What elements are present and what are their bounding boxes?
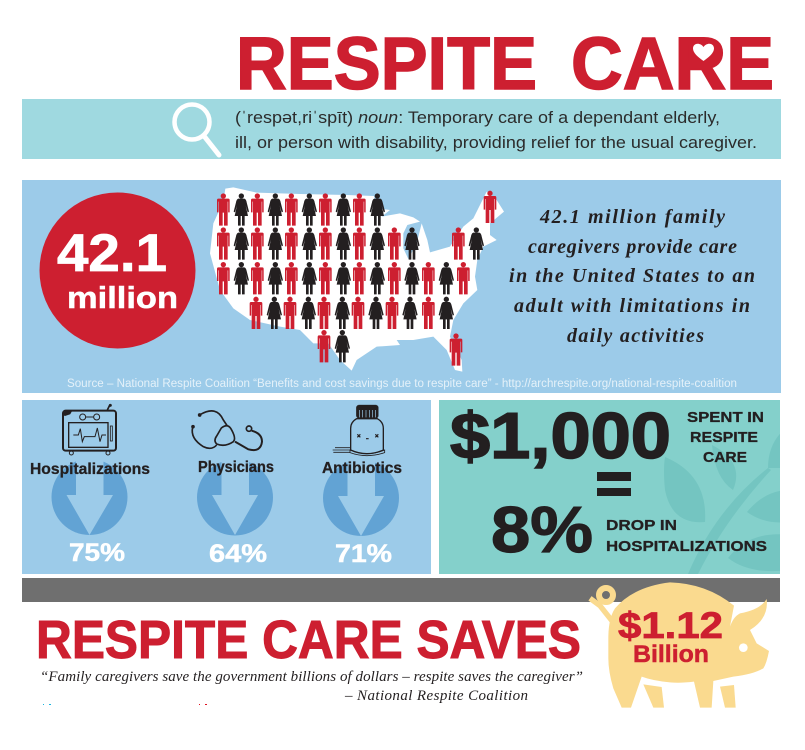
caregivers description: in the United States to an [509,265,755,287]
value: 71%: 71% [335,540,392,568]
arrow: physicians down [197,459,273,536]
panel: caregivers statistic [22,180,781,393]
stat circle: 42.1 million: 42.1 [57,224,167,283]
text: spent in respite care: SPENT IN [687,409,764,426]
panel: cost equation [439,399,790,574]
text: drop in hospitalizations: DROP IN [606,517,677,534]
title: RESPITE [236,22,537,105]
icon: piggy bank with savings: Billion [633,641,709,668]
title: CARE [571,22,774,105]
icon: piggy bank with savings [590,582,769,708]
source line: Source – National Respite Coalition “Benefits and cost savings due to respite care” - http://archrespite.org/national-respite-coalition [67,378,737,390]
stat circle: 42.1 million: million [67,280,178,315]
icon: magnifying glass [174,104,219,155]
panel: definition [22,99,781,159]
label: Antibiotics: Antibiotics [322,460,402,477]
caregivers description: daily activities [567,325,704,347]
label: Hospitalizations: Hospitalizations [30,461,150,478]
icon: heart monitor [63,404,116,455]
leaf background [664,434,780,574]
caregivers description [509,206,755,347]
map of the United States with people pictogram [210,187,504,372]
icon: heart [693,44,714,61]
icon: stethoscope [192,411,262,450]
caregivers description: caregivers provide care [528,236,737,258]
quote [40,669,583,704]
text: spent in respite care [687,409,764,466]
text: spent in respite care: CARE [703,449,747,466]
value: $1.12 Billion: $1.12 [618,605,723,646]
red figures [217,191,496,366]
text: 8%: 8% [491,493,593,566]
title [236,22,774,105]
value: 64%: 64% [209,540,267,568]
arrow: antibiotics down [323,460,399,536]
heading: respite care saves: RESPITE CARE SAVES [36,610,581,670]
text: spent in respite care: RESPITE [690,429,758,446]
US map silhouette [210,187,504,372]
stat circle: 42.1 million [40,192,196,348]
definition text: ill, or person with disability, providing relief for the usual caregiver. [235,134,757,152]
gray divider band [22,578,780,602]
black figures [234,193,484,362]
quote: “Family caregivers save the government billions of dollars – respite saves the caregiver” [40,669,583,685]
definition text: (ˈrespət,riˈspīt) noun: Temporary care of a dependant elderly, [235,109,720,127]
text: drop in hospitalizations: HOSPITALIZATIONS [606,538,767,555]
text: drop in hospitalizations [606,517,767,555]
caregivers description: adult with limitations in [514,295,750,317]
arrow: hospitalizations down [52,459,128,535]
equals sign [597,472,631,496]
label: Physicians: Physicians [198,459,274,476]
panel: reductions in care use [22,400,431,574]
caregivers description: 42.1 million family [539,206,725,228]
value: 75%: 75% [69,539,125,567]
quote: – National Respite Coalition [344,688,528,704]
text: $1,000: $1,000 [450,399,671,472]
definition text [235,109,757,152]
icon: pill bottle [333,405,385,456]
